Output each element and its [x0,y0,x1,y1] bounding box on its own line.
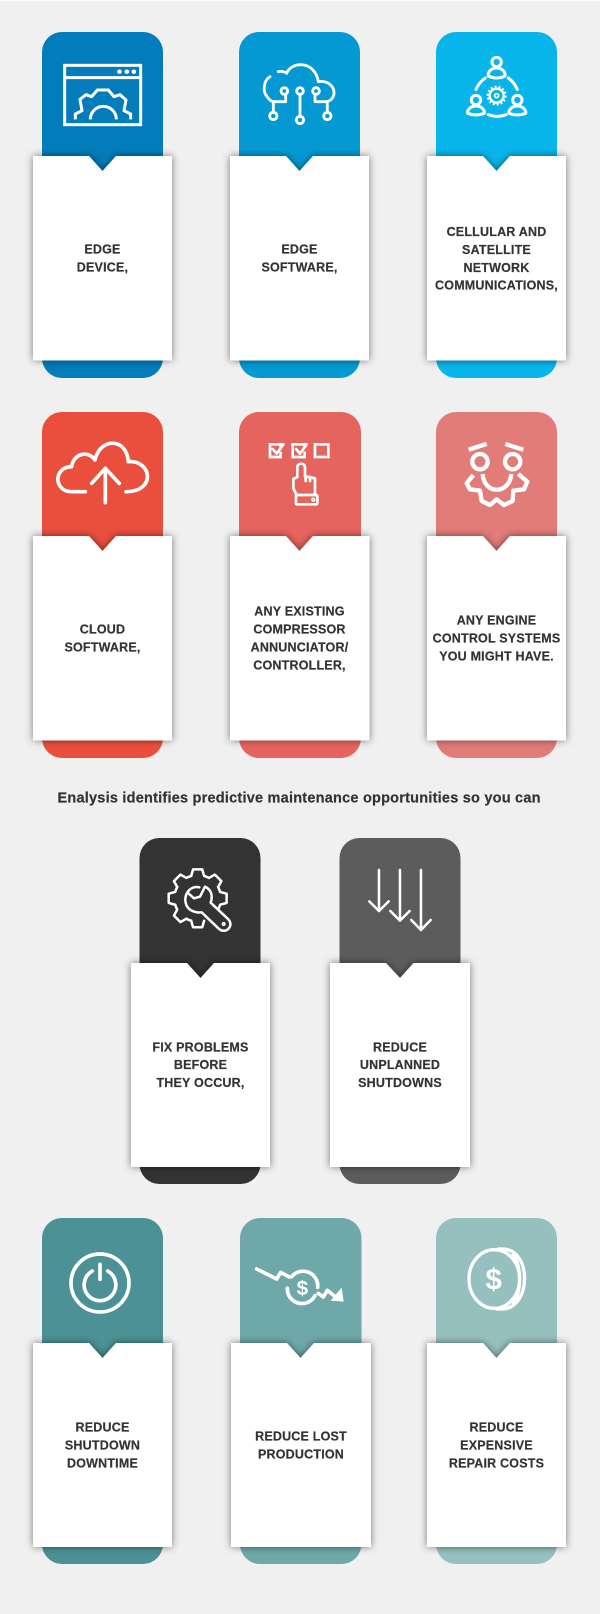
card: fix problems [131,963,270,1167]
icon: falling dollar [257,1269,344,1304]
icon: browser window with gear [65,65,141,125]
label: reduce shutdown downtime: DOWNTIME [67,1456,138,1470]
card: reduce shutdown downtime [33,1343,172,1547]
icon: people around a gear [468,57,526,116]
icon: gear and wrench [169,869,230,931]
card: edge device [33,156,172,360]
card: reduce unplanned shutdowns [330,963,470,1167]
label: reduce expensive repair costs: REPAIR COSTS [449,1456,544,1470]
label: reduce shutdown downtime: REDUCE [76,1420,129,1434]
label: compressor annunciator: COMPRESSOR [253,622,346,636]
panel: compressor annunciator [230,412,370,758]
label: reduce shutdown downtime: SHUTDOWN [65,1438,140,1452]
label: fix problems: FIX PROBLEMS [152,1040,249,1054]
panel: cloud software [33,412,172,758]
label: engine control systems: YOU MIGHT HAVE. [439,650,554,664]
icon: power button [71,1254,129,1312]
card: engine control systems [427,536,566,740]
icon: three down arrows [369,870,431,930]
panel: engine control systems [427,412,566,758]
panel: reduce expensive repair costs [427,1218,566,1564]
icon: checkboxes and pointing hand [270,444,328,504]
label: cloud software: SOFTWARE, [64,640,141,654]
panel: edge device [33,32,172,378]
panel: reduce lost production [231,1218,371,1564]
label: edge software: SOFTWARE, [261,260,338,274]
panel: reduce shutdown downtime [33,1218,172,1564]
icon: falling dollar: $ [297,1277,309,1300]
panel: fix problems [131,838,270,1184]
label: engine control systems: ANY ENGINE [457,614,536,628]
label: reduce unplanned shutdowns: SHUTDOWNS [358,1076,442,1090]
label: reduce unplanned shutdowns: REDUCE [373,1040,427,1054]
label: cellular communications: CELLULAR AND [447,225,546,239]
label: compressor annunciator: ANY EXISTING [254,604,345,618]
label: cellular communications: NETWORK [464,261,529,275]
panel: edge software [230,32,369,378]
icon: cloud upload [58,443,147,503]
label: reduce expensive repair costs: EXPENSIVE [460,1438,533,1452]
label: edge software: EDGE [281,242,318,256]
card: cellular communications [427,156,566,360]
panel: cellular and satellite network communications [427,32,566,378]
card: reduce lost production [231,1343,371,1547]
icon: coin [469,1249,525,1309]
label: fix problems: BEFORE [174,1058,227,1072]
label: cellular communications: SATELLITE [462,243,531,257]
label: reduce lost production: PRODUCTION [258,1448,344,1462]
panel: reduce unplanned shutdowns [330,838,470,1184]
card: edge software [230,156,369,360]
label: cellular communications: COMMUNICATIONS, [435,278,558,292]
heading: analysis statement: Enalysis identifies predictive maintenance opportunities so you can [58,790,540,806]
label: compressor annunciator: CONTROLLER, [253,658,346,672]
label: fix problems: THEY OCCUR, [156,1076,245,1090]
icon: cloud circuit [264,65,334,124]
label: cloud software: CLOUD [80,622,125,636]
card: reduce expensive repair costs [427,1343,566,1547]
label: edge device: DEVICE, [77,260,128,274]
label: reduce lost production: REDUCE LOST [255,1430,347,1444]
label: engine control systems: CONTROL SYSTEMS [433,632,560,646]
card: cloud software [33,536,172,740]
label: compressor annunciator: ANNUNCIATOR/ [251,640,349,654]
icon: coin: $ [485,1264,502,1297]
icon: gear face [467,444,527,505]
label: reduce expensive repair costs: REDUCE [470,1420,523,1434]
label: edge device: EDGE [84,242,121,256]
label: reduce unplanned shutdowns: UNPLANNED [360,1058,440,1072]
card: compressor annunciator [230,536,370,740]
